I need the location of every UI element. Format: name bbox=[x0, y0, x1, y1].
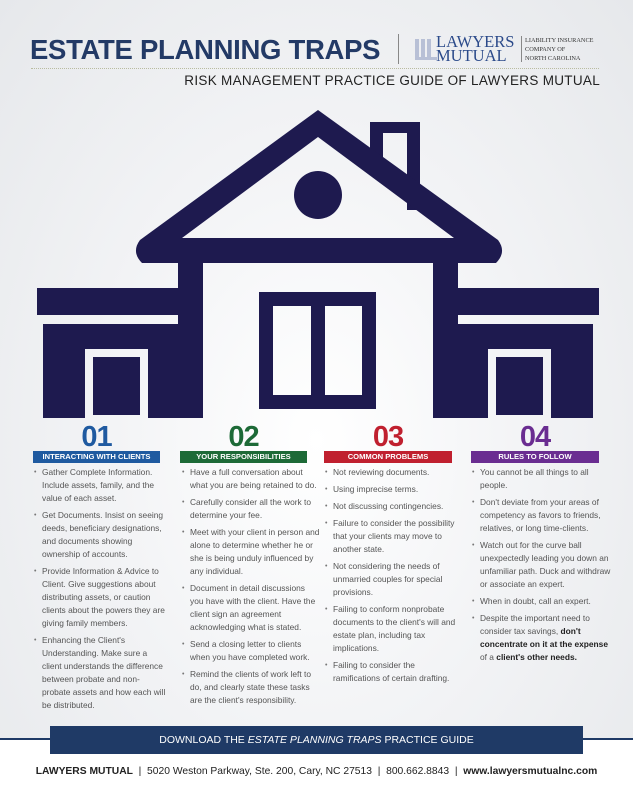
bullet list: When in doubt, call an expert. bbox=[480, 596, 591, 606]
bullet list bbox=[472, 467, 610, 662]
logo: Lawyers Mutual: LAWYERS bbox=[436, 32, 514, 51]
bullet list: Not reviewing documents. bbox=[333, 467, 429, 477]
label: RULES TO FOLLOW bbox=[498, 452, 572, 461]
bullet list: You cannot be all things to all people. bbox=[480, 467, 589, 490]
bullet list: Failing to conform nonprobate documents to the client's will and estate plan, including tax implications. bbox=[333, 604, 455, 653]
chimney bbox=[370, 122, 420, 210]
bullet list: Document in detail discussions you have with the client. Have the client sign an agreement acknowledging what is stated. bbox=[190, 583, 315, 632]
bullet list: Meet with your client in person and alone to determine whether he or she is being unduly influenced by any individual. bbox=[190, 527, 319, 576]
house illustration bbox=[37, 110, 599, 418]
left wing bbox=[37, 288, 178, 315]
number 03: 03 bbox=[373, 421, 403, 453]
bullet list: Have a full conversation about what you are being retained to do. bbox=[190, 467, 317, 490]
bullet list: Enhancing the Client's Understanding. Make sure a client understands the difference between probate and non-probate assets and how each will be distributed. bbox=[42, 635, 165, 710]
logo: Lawyers Mutual: MUTUAL bbox=[436, 46, 507, 65]
contact line: LAWYERS MUTUAL | 5020 Weston Parkway, Ste. 200, Cary, NC 27513 | 800.662.8843 | www.lawyersmutualnc.com bbox=[36, 766, 597, 777]
number 02: 02 bbox=[228, 421, 259, 453]
bullet list: Remind the clients of work left to do, and clearly state these tasks are the client's responsibility. bbox=[190, 669, 311, 705]
bullet list: Despite the important need to consider tax savings, don't concentrate on it at the expense of a client's other needs. bbox=[480, 613, 608, 662]
bullet list: Failure to consider the possibility that your clients may move to another state. bbox=[333, 518, 454, 554]
bullet list: Send a closing letter to clients when you have completed work. bbox=[190, 639, 310, 662]
label: YOUR RESPONSIBILITIES bbox=[196, 452, 291, 461]
logo: Lawyers Mutual: NORTH CAROLINA bbox=[525, 55, 580, 62]
bullet list: Don't deviate from your areas of competency as favors to friends, relatives, or long time-clients. bbox=[480, 497, 601, 533]
download banner: DOWNLOAD THE ESTATE PLANNING TRAPS PRACTICE GUIDE bbox=[159, 734, 474, 746]
bullet list: Get Documents. Insist on seeing deeds, beneficiary designations, and documents showing ownership of accounts. bbox=[42, 510, 163, 559]
panel: 03 common problems bbox=[324, 421, 455, 683]
bullet list bbox=[325, 467, 455, 683]
number 01: 01 bbox=[81, 421, 112, 453]
panel: 04 rules to follow bbox=[471, 421, 610, 662]
subtitle: RISK MANAGEMENT PRACTICE GUIDE OF LAWYERS MUTUAL bbox=[184, 73, 600, 88]
bullet list: Failing to consider the ramifications of certain drafting. bbox=[333, 660, 449, 683]
label bbox=[324, 451, 452, 463]
logo: Lawyers Mutual: COMPANY OF bbox=[525, 46, 565, 53]
bullet list: Carefully consider all the work to determine your fee. bbox=[190, 497, 311, 520]
bullet list: Provide Information & Advice to Client. Give suggestions about distributing assets, or caution clients about the powers they are giving family members. bbox=[42, 566, 165, 628]
bullet list: Not discussing contingencies. bbox=[333, 501, 443, 511]
logo: Lawyers Mutual: LIABILITY INSURANCE bbox=[525, 37, 594, 44]
label: COMMON PROBLEMS bbox=[348, 452, 428, 461]
roof bbox=[136, 110, 502, 263]
title: ESTATE PLANNING TRAPS bbox=[30, 34, 380, 65]
panel: 01 interacting with clients bbox=[33, 421, 165, 710]
footer background bbox=[0, 740, 633, 800]
logo: Lawyers Mutual bbox=[398, 32, 594, 65]
gable window bbox=[294, 171, 342, 219]
label bbox=[33, 451, 160, 463]
bullet list: Using imprecise terms. bbox=[333, 484, 418, 494]
bullet list: Not considering the needs of unmarried couples for special provisions. bbox=[333, 561, 442, 597]
bullet list bbox=[34, 467, 165, 710]
label bbox=[471, 451, 599, 463]
main walls bbox=[178, 260, 203, 418]
bullet list bbox=[182, 467, 319, 705]
label bbox=[180, 451, 307, 463]
right wing bbox=[458, 288, 599, 315]
number 04: 04 bbox=[520, 421, 550, 453]
bullet list: Watch out for the curve ball unexpectedly leading you down an unfamiliar path. Duck and withdraw or associate an expert. bbox=[480, 540, 610, 589]
label: INTERACTING WITH CLIENTS bbox=[42, 452, 150, 461]
download banner bbox=[50, 726, 583, 754]
bullet list: Gather Complete Information. Include assets, family, and the value of each asset. bbox=[42, 467, 154, 503]
panel: 02 your responsibilities bbox=[180, 421, 319, 705]
center window bbox=[259, 292, 376, 409]
